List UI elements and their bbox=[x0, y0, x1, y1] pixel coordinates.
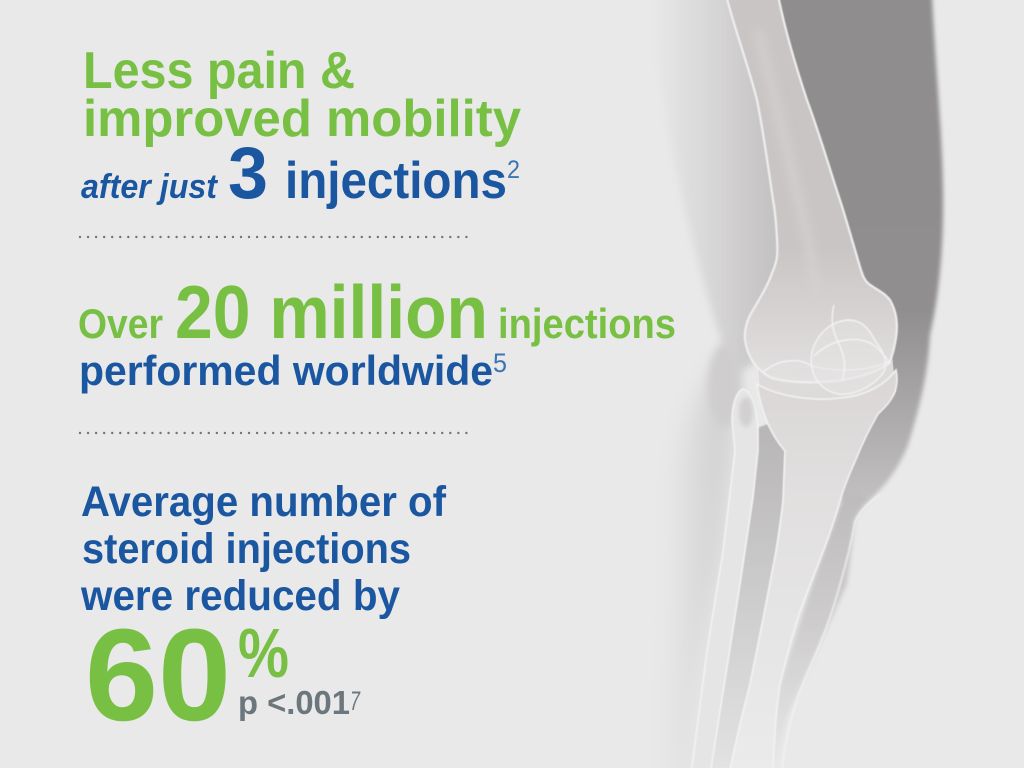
joint space between femur and tibia bbox=[758, 355, 896, 402]
femur bbox=[726, 0, 897, 382]
heading line 2: improved mobility bbox=[83, 90, 521, 148]
thigh soft tissue, left side bbox=[648, 0, 790, 375]
p value: p <.001 bbox=[238, 684, 350, 721]
body line 2: steroid injections bbox=[82, 525, 411, 573]
gap between tibia and fibula bbox=[708, 424, 785, 768]
divider 2 bbox=[80, 432, 471, 434]
femur shaft shading bbox=[758, 30, 816, 300]
stat block: steroid injections reduced by 60 percent bbox=[80, 478, 447, 748]
body line 1: Average number of bbox=[81, 478, 447, 526]
thigh and knee shadow behind femur bbox=[765, 0, 943, 500]
lower leg soft tissue, left side bbox=[662, 360, 735, 768]
fibula head shading bbox=[739, 397, 753, 427]
injections label: injections bbox=[498, 300, 676, 347]
stat block: less pain and improved mobility bbox=[81, 42, 521, 214]
illustration: translucent knee and leg bones bbox=[648, 0, 943, 768]
20 million figure: 20 million bbox=[175, 270, 488, 354]
over label: Over bbox=[78, 300, 163, 347]
divider 1 bbox=[80, 236, 471, 238]
fibula bbox=[691, 389, 758, 768]
after just label: after just bbox=[81, 168, 219, 206]
calf lower outline bbox=[782, 494, 880, 768]
number 3: 3 bbox=[228, 133, 268, 214]
reference 5: 5 bbox=[493, 348, 507, 378]
reference 7: 7 bbox=[350, 686, 361, 716]
patella and condyles bbox=[763, 305, 890, 394]
big figure 60: 60 bbox=[85, 601, 231, 748]
injections label: injections bbox=[285, 152, 507, 210]
stat block: over 20 million injections bbox=[78, 270, 676, 394]
heading line 1: Less pain & bbox=[83, 42, 355, 100]
knee shadow left of joint bbox=[708, 343, 742, 427]
reference 2: 2 bbox=[507, 156, 520, 184]
tibia bbox=[729, 370, 897, 768]
percent sign: % bbox=[238, 614, 289, 692]
performed worldwide: performed worldwide bbox=[79, 347, 493, 394]
calf shadow behind tibia bbox=[765, 490, 872, 768]
body line 3: were reduced by bbox=[80, 572, 400, 620]
